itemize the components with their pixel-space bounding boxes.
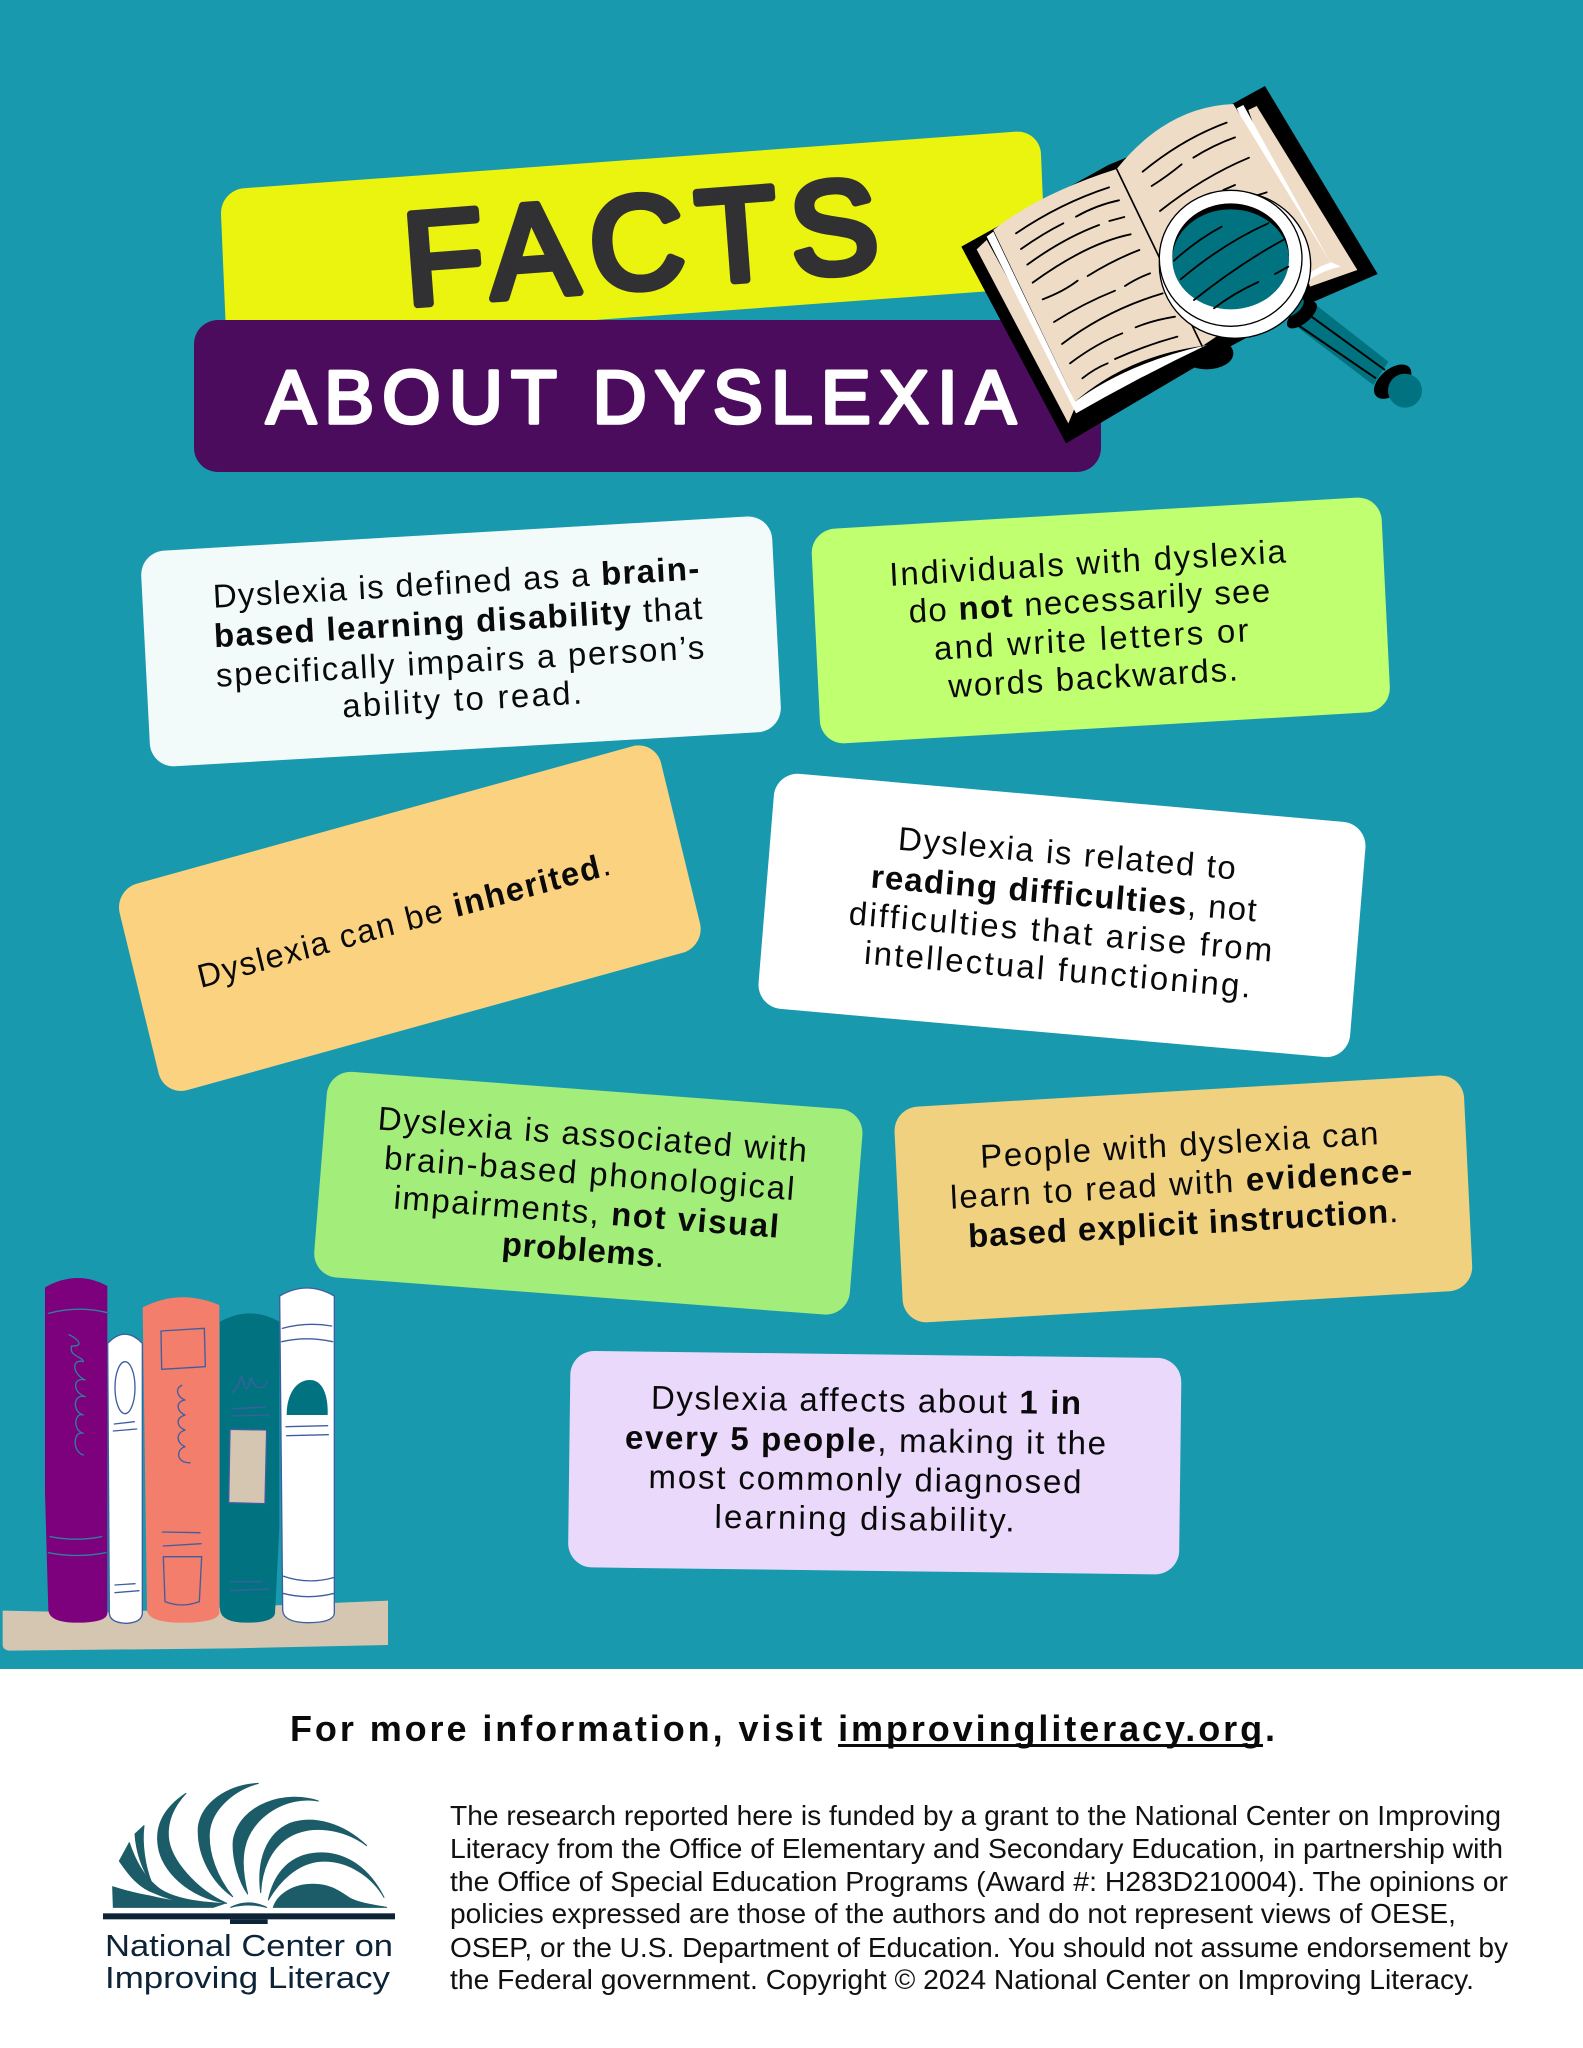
text block: and write letters or bbox=[933, 611, 1249, 667]
funding disclaimer text bbox=[450, 1800, 1508, 1995]
text block: difficulties that arise from bbox=[848, 894, 1274, 968]
logo: National Center on Improving Literacy bbox=[103, 1783, 395, 1995]
title: facts about dyslexia bbox=[194, 130, 1101, 472]
text block: Dyslexia affects about 1 in bbox=[651, 1379, 1081, 1421]
funding disclaimer text: Literacy from the Office of Elementary and Secondary Education, in partnership with bbox=[450, 1833, 1503, 1864]
logo text: National Center on bbox=[105, 1928, 393, 1963]
panel: reading difficulties bbox=[757, 772, 1367, 1059]
funding disclaimer text: policies expressed are those of the authors and do not represent views of OESE, bbox=[450, 1898, 1456, 1929]
text block: specifically impairs a person’s bbox=[215, 628, 705, 694]
text block: People with dyslexia can bbox=[979, 1114, 1379, 1175]
text block: most commonly diagnosed bbox=[648, 1458, 1082, 1500]
text block: based learning disability that bbox=[213, 589, 703, 654]
text block: brain-based phonological bbox=[383, 1139, 796, 1207]
panel: brain-based definition bbox=[140, 515, 782, 768]
text block: learning disability. bbox=[714, 1498, 1015, 1539]
purple subtitle banner bbox=[194, 320, 1101, 472]
panel: prevalence bbox=[568, 1351, 1182, 1575]
icon: open book with magnifying glass bbox=[961, 86, 1422, 443]
text block bbox=[211, 549, 707, 732]
panel: phonological impairments bbox=[312, 1070, 864, 1316]
logo text bbox=[105, 1928, 393, 1995]
text block: words backwards. bbox=[946, 650, 1239, 705]
text block bbox=[888, 532, 1293, 708]
text block: intellectual functioning. bbox=[863, 934, 1252, 1005]
text block: based explicit instruction. bbox=[967, 1192, 1399, 1254]
text block: Dyslexia can be inherited. bbox=[193, 845, 614, 995]
icon: books on shelf bbox=[3, 1278, 388, 1651]
heading: ABOUT DYSLEXIA: ABOUT DYSLEXIA bbox=[266, 355, 1016, 439]
yellow title banner bbox=[220, 130, 1047, 347]
text block: every 5 people, making it the bbox=[625, 1419, 1106, 1461]
logo mark: open book arcs bbox=[103, 1783, 395, 1924]
text block bbox=[367, 1099, 808, 1284]
text block: Individuals with dyslexia bbox=[888, 532, 1287, 593]
funding disclaimer text: the Office of Special Education Programs (Award #: H283D210004). The opinions or bbox=[450, 1866, 1508, 1897]
text block: do not necessarily see bbox=[908, 571, 1271, 630]
funding disclaimer text: the Federal government. Copyright © 2024 National Center on Improving Literacy. bbox=[450, 1964, 1474, 1995]
text block bbox=[844, 816, 1280, 1006]
text block bbox=[624, 1378, 1107, 1540]
text block: Dyslexia is related to bbox=[897, 820, 1237, 886]
text block bbox=[947, 1112, 1415, 1255]
panel: letters and words backwards bbox=[811, 496, 1391, 745]
text block: Dyslexia is associated with bbox=[377, 1099, 808, 1169]
text block: impairments, not visual bbox=[392, 1179, 780, 1245]
text block: problems. bbox=[501, 1225, 666, 1274]
call to action: more information: For more information, visit improvingliteracy.org. bbox=[290, 1708, 1275, 1749]
heading: FACTS: FACTS bbox=[398, 151, 883, 333]
text block: ability to read. bbox=[341, 673, 583, 724]
panel: inherited bbox=[114, 740, 706, 1096]
text block: reading difficulties, not bbox=[870, 858, 1258, 928]
text block: learn to read with evidence- bbox=[949, 1151, 1413, 1216]
logo text: Improving Literacy bbox=[105, 1960, 391, 1995]
funding disclaimer text: OSEP, or the U.S. Department of Education. You should not assume endorsement by bbox=[450, 1932, 1508, 1963]
panel: evidence-based instruction bbox=[893, 1074, 1473, 1324]
text block: Dyslexia is defined as a brain- bbox=[212, 549, 700, 615]
funding disclaimer text: The research reported here is funded by a grant to the National Center on Improving bbox=[450, 1800, 1501, 1831]
